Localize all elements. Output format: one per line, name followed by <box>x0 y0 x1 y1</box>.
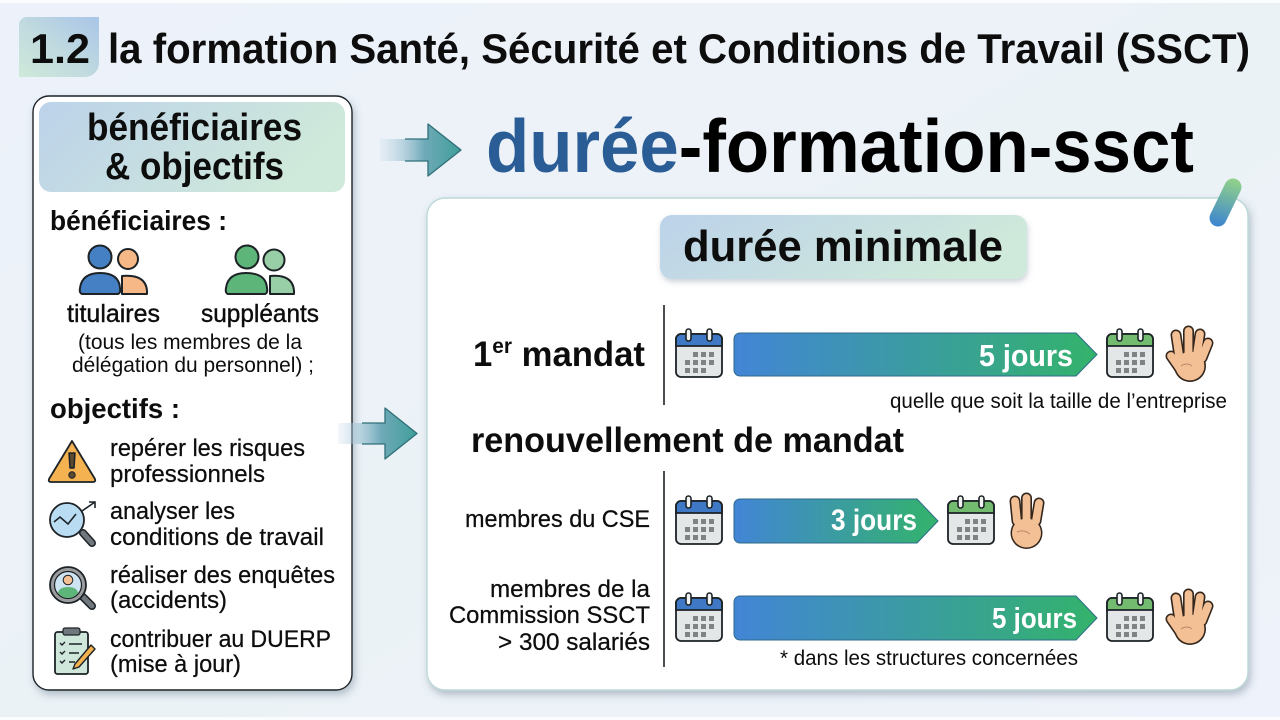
panel heading <box>39 102 345 192</box>
note: délégation du personnel: (tous les membres de la <box>78 331 302 354</box>
row label: Commission SSCT: membres de la <box>490 576 651 603</box>
row: 1er mandat 5 jours: 5 jours <box>979 338 1073 373</box>
row label: membres du CSE: membres du CSE <box>465 506 650 533</box>
icon: suppléants <box>226 246 294 294</box>
objective: repérer les risques: professionnels <box>110 461 265 488</box>
objective: enquêtes <box>110 562 335 614</box>
section number badge <box>19 17 99 77</box>
objective: analyser: analyser les <box>110 498 235 525</box>
icon: enquête <box>50 567 92 606</box>
icon: analyse <box>50 502 95 543</box>
objective: analyser: conditions de travail <box>110 524 324 551</box>
objective: enquêtes: (accidents) <box>110 587 227 614</box>
heading: renouvellement de mandat: renouvellement de mandat <box>471 421 904 460</box>
decorative tape <box>1218 187 1233 218</box>
heading pill <box>660 215 1027 279</box>
title: la formation Santé, Sécurité et Conditions de Travail (SSCT) <box>108 25 1250 72</box>
heading: objectifs: objectifs : <box>50 393 180 424</box>
objective: repérer les risques <box>110 435 305 488</box>
arrow: vers la durée minimale <box>338 408 417 459</box>
row label: Commission SSCT <box>449 576 651 656</box>
label: titulaires: titulaires <box>67 300 160 328</box>
heading: bénéficiaires: bénéficiaires : <box>50 205 227 236</box>
heading pill: durée minimale <box>683 222 1003 271</box>
row label: 1er mandat: er <box>492 335 512 358</box>
panel heading: & objectifs <box>105 146 284 188</box>
row label: Commission SSCT: Commission SSCT <box>449 602 650 629</box>
main heading: durée-formation-ssct <box>486 104 1194 188</box>
objective: enquêtes: réaliser des enquêtes <box>110 562 335 589</box>
label: suppléants: suppléants <box>201 300 319 328</box>
row: Commission 5 jours: 5 jours <box>992 603 1077 635</box>
panel heading: bénéficiaires <box>87 107 302 149</box>
objective: DUERP <box>110 626 331 678</box>
row: Commission 5 jours <box>676 593 1208 645</box>
note: taille de l'entreprise: quelle que soit la taille de l’entreprise <box>890 390 1227 413</box>
section number badge: 1.2 <box>30 25 90 72</box>
panel: durée minimale <box>427 187 1248 690</box>
objective: DUERP: (mise à jour) <box>110 651 241 678</box>
arrow: vers le titre <box>380 124 461 176</box>
row label: Commission SSCT: > 300 salariés <box>498 629 650 656</box>
icon: titulaires <box>80 246 147 294</box>
objective: repérer les risques: repérer les risques <box>110 435 305 462</box>
objective: analyser <box>110 498 324 551</box>
row label: 1er mandat: mandat <box>512 335 645 374</box>
note: délégation du personnel: délégation du personnel) ; <box>72 354 314 377</box>
icon: clipboard <box>55 628 95 674</box>
row: 1er mandat 5 jours <box>676 329 1208 382</box>
note: structures concernées: * dans les structures concernées <box>780 647 1078 670</box>
icon: warning <box>49 441 95 482</box>
panel: bénéficiaires et objectifs <box>33 96 352 690</box>
row: CSE 3 jours: 3 jours <box>831 504 917 537</box>
note: délégation du personnel <box>72 331 314 377</box>
row label: 1er mandat: 1 <box>473 335 492 374</box>
row: CSE 3 jours <box>676 496 1042 549</box>
objective: DUERP: contribuer au DUERP <box>110 626 331 653</box>
